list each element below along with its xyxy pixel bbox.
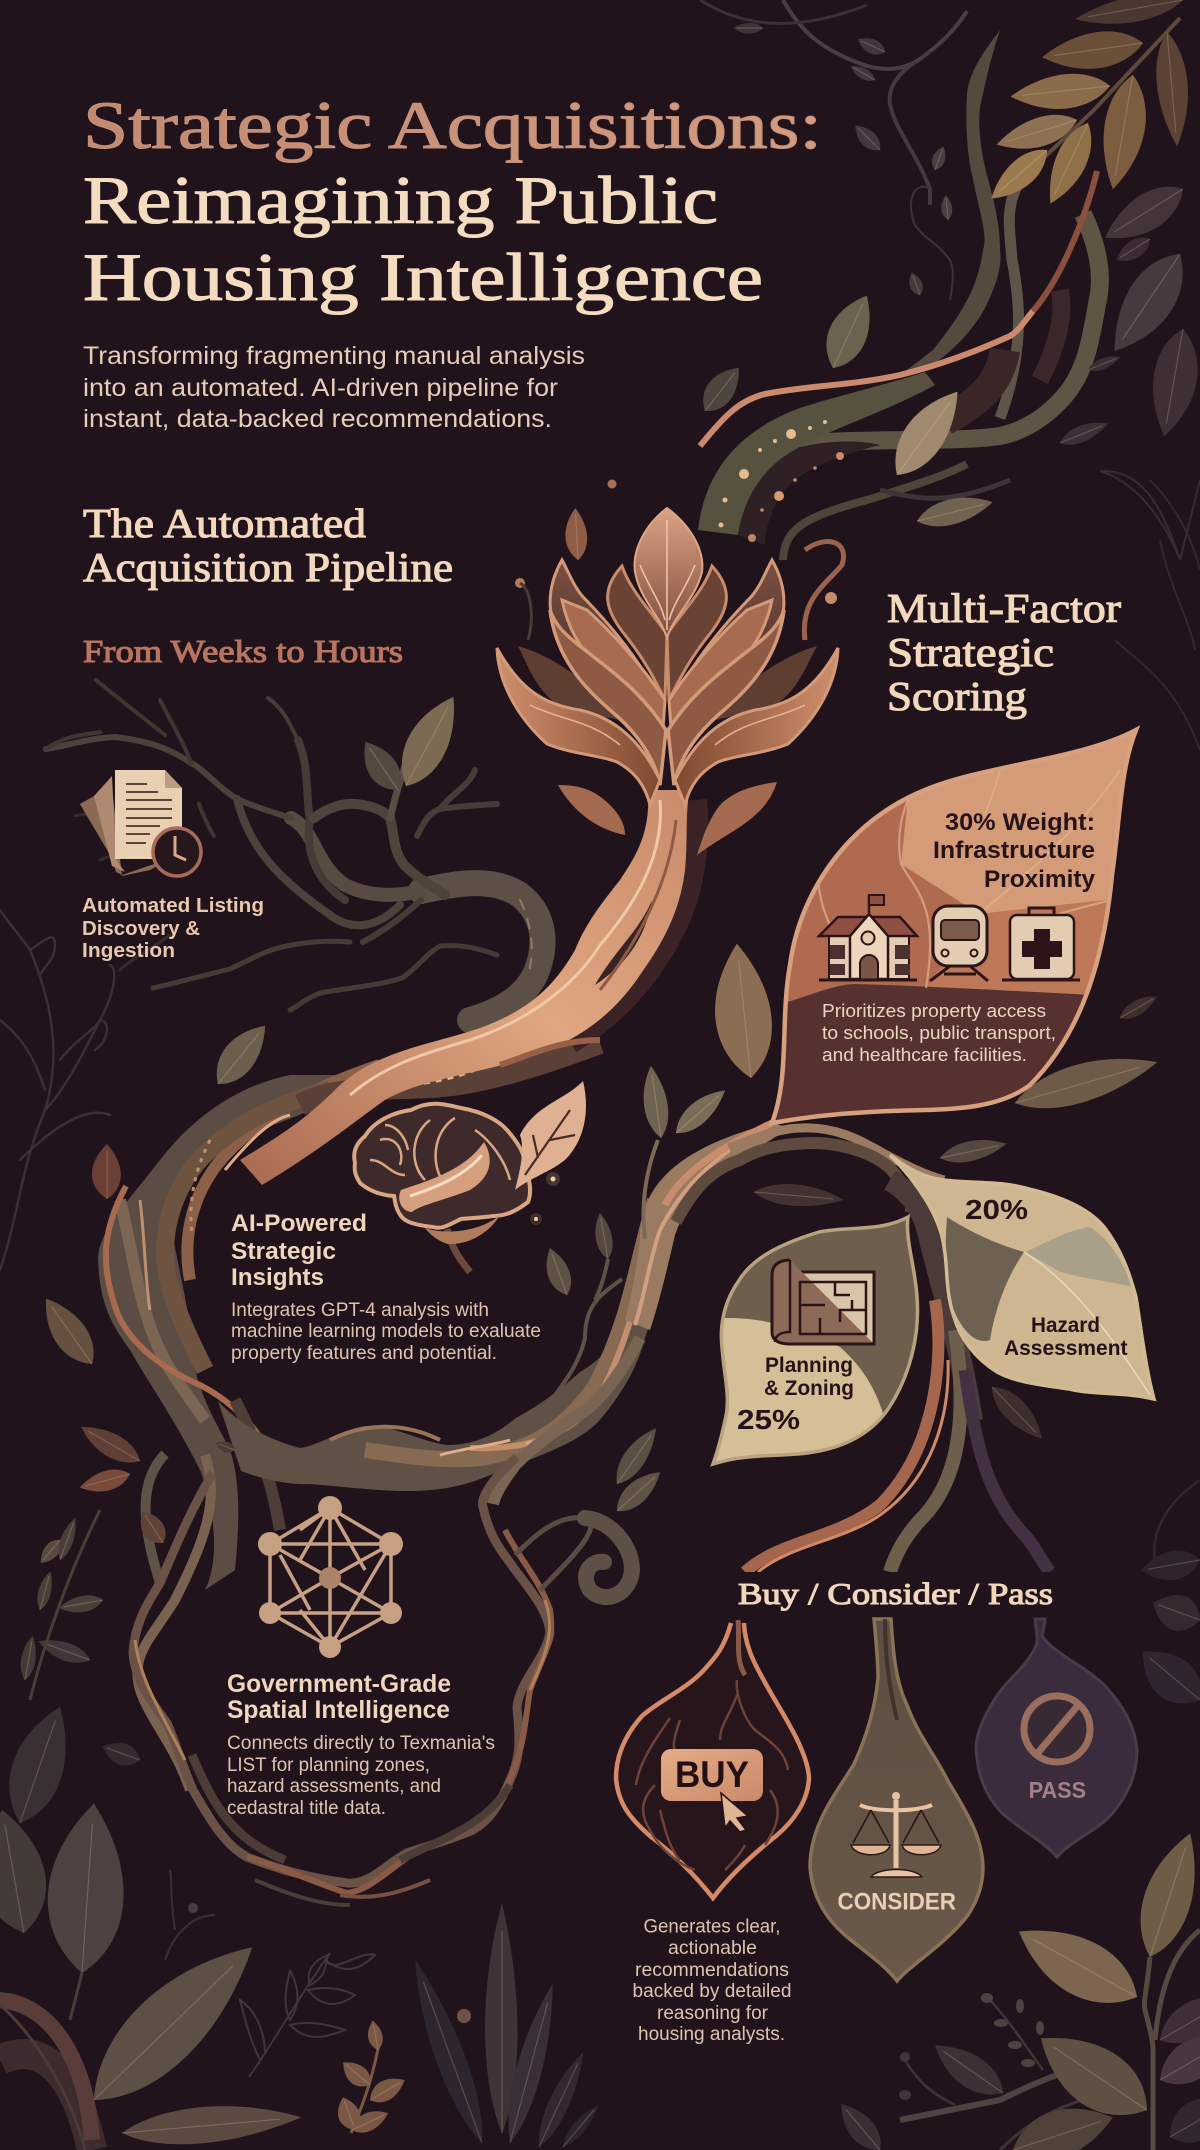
background foliage: top right vines and leaves xyxy=(694,0,1200,750)
text: planning and zoning: Planning xyxy=(765,1354,853,1377)
text: AI-powered heading: Strategic xyxy=(231,1238,336,1265)
scattered leaves xyxy=(18,941,1162,1771)
background foliage: bottom right xyxy=(831,1826,1200,2150)
text: automated listing: Discovery & xyxy=(82,918,200,940)
icon: school xyxy=(819,895,917,980)
drop: buy xyxy=(616,1620,809,1898)
outline sprig xyxy=(240,1953,375,2077)
scoring branches xyxy=(555,1128,1050,1572)
icon: buy button xyxy=(661,1749,763,1801)
text: infrastructure body: to schools, public transport, xyxy=(822,1022,1056,1043)
text: infrastructure body: and healthcare facilities. xyxy=(822,1044,1027,1065)
title: Reimagining Public xyxy=(83,162,718,238)
panel: planning and zoning leaf xyxy=(710,1214,920,1467)
text: AI-powered heading xyxy=(231,1210,367,1291)
subheading: from weeks to hours: From Weeks to Hours xyxy=(83,633,403,669)
text: automated listing: Ingestion xyxy=(82,940,175,962)
subtitle xyxy=(83,342,585,433)
text: automated listing: Automated Listing xyxy=(82,895,264,917)
subtitle: into an automated. AI-driven pipeline for xyxy=(83,374,558,402)
text: planning and zoning: 25% xyxy=(737,1404,800,1435)
heading: multi-factor strategic scoring: Scoring xyxy=(887,673,1027,719)
label band: buy consider pass: Buy / Consider / Pass xyxy=(738,1576,1053,1611)
text: AI-powered heading: AI-Powered xyxy=(231,1210,367,1237)
drop: pass xyxy=(976,1619,1137,1857)
sparkle dots on vine xyxy=(718,420,844,542)
text: recommendations note: actionable xyxy=(668,1938,757,1959)
text: automated listing xyxy=(82,895,264,962)
leaves on root branches xyxy=(353,687,470,798)
heading: multi-factor strategic scoring: Multi-Factor xyxy=(887,585,1121,631)
icon: documents with clock xyxy=(80,770,201,876)
heading: multi-factor strategic scoring xyxy=(887,585,1121,719)
text: AI-powered body: property features and potential. xyxy=(231,1343,497,1364)
heading: automated acquisition pipeline: The Automated xyxy=(83,500,366,546)
subtitle: Transforming fragmenting manual analysis xyxy=(83,342,585,370)
heading: multi-factor strategic scoring: Strategic xyxy=(887,629,1054,675)
text: recommendations note: reasoning for xyxy=(657,2003,769,2024)
label band: buy consider pass xyxy=(700,1572,1100,1618)
title: Strategic Acquisitions: xyxy=(83,87,822,163)
panel: AI-powered strategic insights xyxy=(231,1081,586,1364)
title: Housing Intelligence xyxy=(83,239,763,315)
text: infrastructure body: Prioritizes property access xyxy=(822,1000,1046,1021)
small copper plant xyxy=(332,2019,409,2138)
text: government-grade heading xyxy=(227,1670,451,1724)
text: 30% weight heading: Infrastructure xyxy=(933,837,1095,864)
background foliage: bottom centre seaweed leaves xyxy=(401,1903,603,2150)
background foliage: bottom left xyxy=(0,1698,375,2150)
icon: medical kit xyxy=(1002,908,1080,980)
text: hazard assessment xyxy=(965,1194,1128,1360)
left dark root branches xyxy=(46,680,543,1020)
text: planning and zoning xyxy=(737,1354,854,1435)
main twisted trunk vine xyxy=(98,790,790,1905)
icon: brain with leaf xyxy=(354,1081,586,1272)
text: AI-powered body xyxy=(231,1300,541,1364)
text: government-grade heading: Government-Grade xyxy=(227,1670,451,1698)
text: infrastructure body xyxy=(822,1000,1056,1065)
panel: automated listing discovery xyxy=(80,770,264,962)
text: AI-powered body: machine learning models to exaluate xyxy=(231,1321,541,1342)
text: government-grade heading: Spatial Intelligence xyxy=(227,1696,450,1724)
heading: automated acquisition pipeline xyxy=(83,500,453,590)
drop: pass: PASS xyxy=(1029,1777,1086,1803)
flower icon xyxy=(497,480,844,855)
panel: government-grade spatial intelligence xyxy=(227,1496,495,1819)
icon: cursor xyxy=(721,1793,748,1832)
text: hazard assessment: 20% xyxy=(965,1194,1028,1225)
text: government-grade body: hazard assessments, and xyxy=(227,1776,441,1797)
icon: blueprint xyxy=(772,1260,874,1344)
drop: consider: CONSIDER xyxy=(838,1888,956,1916)
heading: automated acquisition pipeline: Acquisition Pipeline xyxy=(83,544,453,590)
text: 30% weight heading: Proximity xyxy=(984,866,1096,893)
text: government-grade body: Connects directly to Texmania's xyxy=(227,1733,495,1754)
left faint outline branches xyxy=(0,910,114,1270)
panel: buy consider pass outcomes xyxy=(616,1572,1137,2045)
text: recommendations note xyxy=(632,1916,792,2045)
icon: network graph xyxy=(258,1496,403,1658)
icon: balance scale xyxy=(851,1792,941,1877)
panel: hazard assessment leaf xyxy=(888,1154,1156,1402)
text: AI-powered body: Integrates GPT-4 analysis with xyxy=(231,1300,489,1321)
text: planning and zoning: & Zoning xyxy=(764,1377,854,1400)
text: hazard assessment: Hazard xyxy=(1031,1314,1100,1337)
text: hazard assessment: Assessment xyxy=(1004,1337,1128,1360)
title xyxy=(83,87,822,315)
background foliage: right side dark leaves xyxy=(1128,1480,1200,1717)
text: recommendations note: backed by detailed xyxy=(632,1981,792,2002)
text: 30% weight heading xyxy=(933,809,1096,893)
swirl xyxy=(585,1518,632,1597)
panel: 30% infrastructure proximity leaf xyxy=(760,720,1160,1130)
drop: consider xyxy=(810,1619,983,1981)
icon: train xyxy=(930,906,988,981)
text: recommendations note: housing analysts. xyxy=(638,2024,785,2045)
subtitle: instant, data-backed recommendations. xyxy=(83,405,552,433)
text: government-grade body: cedastral title data. xyxy=(227,1798,386,1819)
text: government-grade body xyxy=(227,1733,495,1819)
icon: buy button: BUY xyxy=(675,1754,749,1795)
text: recommendations note: Generates clear, xyxy=(644,1916,780,1938)
text: 30% weight heading: 30% Weight: xyxy=(945,809,1095,836)
text: recommendations note: recommendations xyxy=(635,1960,789,1981)
text: government-grade body: LIST for planning zones, xyxy=(227,1755,430,1776)
text: AI-powered heading: Insights xyxy=(231,1264,324,1291)
